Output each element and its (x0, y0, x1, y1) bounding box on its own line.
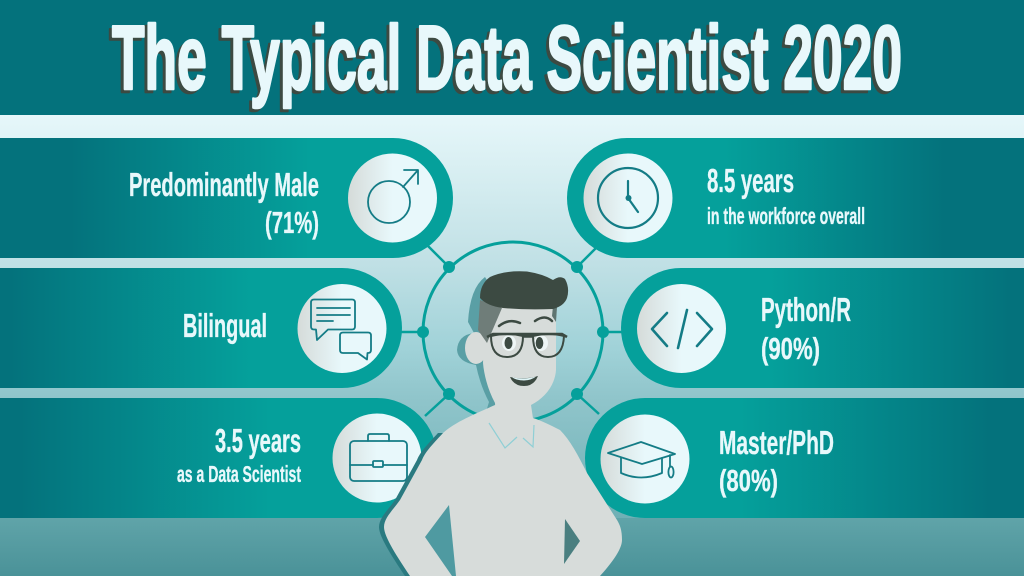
panel: years in workforce (567, 138, 1024, 258)
eyebrows (499, 318, 552, 326)
right arm gap (564, 519, 580, 564)
torso and arms (384, 405, 622, 576)
text: in the workforce overall: in the workforce overall (707, 203, 865, 229)
text: 80 percent: (80%) (719, 463, 778, 498)
hair and head shadow (457, 277, 500, 412)
icon: code brackets (637, 284, 726, 373)
panel: bilingual (0, 268, 402, 388)
heading: 8.5 years: 8.5 years (707, 162, 794, 199)
text: 71 percent: (71%) (265, 205, 319, 240)
body shadow (379, 433, 455, 576)
face and neck (483, 300, 556, 425)
eyes (502, 335, 548, 351)
icon: graduation cap (600, 414, 690, 504)
heading: bilingual: Bilingual (183, 307, 267, 344)
heading: python/r: Python/R (761, 291, 851, 328)
smile (510, 376, 538, 386)
floor band (0, 518, 1024, 576)
heading: predominantly male: Predominantly Male (129, 166, 319, 203)
side hair (478, 300, 502, 343)
panel: years as a data scientist (0, 398, 437, 518)
background panel (0, 115, 1024, 518)
ear (465, 332, 487, 364)
heading: 3.5 years: 3.5 years (215, 422, 301, 459)
network ring with nodes (400, 242, 624, 422)
shirt collar (489, 423, 534, 448)
icon: speech bubbles (298, 284, 386, 373)
panel: master or phd (585, 398, 1024, 518)
title banner (0, 0, 1024, 115)
icon: male symbol (348, 154, 437, 242)
text: 90 percent: (90%) (761, 331, 820, 366)
hair (480, 271, 568, 309)
icon: clock (584, 154, 672, 242)
text: as a data scientist: as a Data Scientist (177, 461, 301, 487)
panel: predominantly male (0, 138, 453, 258)
glasses (487, 334, 567, 357)
left arm gap (425, 505, 456, 576)
panel: python and r (621, 268, 1024, 388)
illustration: data scientist (379, 271, 622, 576)
icon: briefcase (332, 414, 422, 502)
heading: master/phd: Master/PhD (719, 424, 834, 461)
